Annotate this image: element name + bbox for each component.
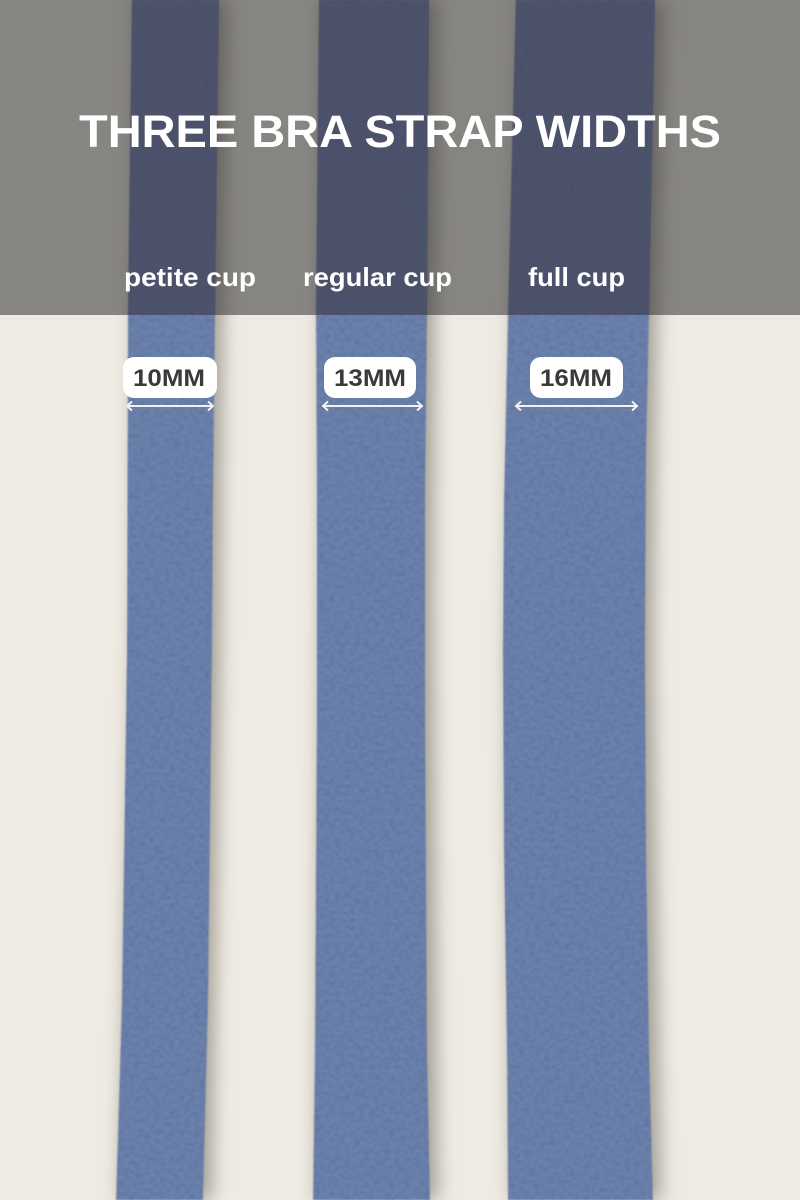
arrow: 13mm width bbox=[323, 405, 422, 407]
badge: 10mm: 10MM bbox=[133, 365, 205, 392]
badge: 13mm: 13MM bbox=[334, 365, 406, 392]
strap: full cup 16mm bbox=[503, 0, 655, 1200]
strap tint inside header band bbox=[128, 0, 655, 315]
label: regular cup: regular cup bbox=[303, 262, 452, 292]
label: full cup: full cup bbox=[528, 262, 625, 292]
badge: 10mm bbox=[123, 357, 217, 398]
arrow: 10mm width bbox=[127, 405, 213, 407]
arrow: 16mm width bbox=[516, 405, 637, 407]
label: petite cup: petite cup bbox=[124, 262, 256, 292]
badge: 16mm: 16MM bbox=[540, 365, 612, 392]
title: THREE BRA STRAP WIDTHS bbox=[79, 106, 721, 157]
badge: 16mm bbox=[530, 357, 623, 398]
strap: petite cup 10mm bbox=[116, 0, 219, 1200]
strap shadows bbox=[120, 0, 663, 1200]
badge: 13mm bbox=[324, 357, 416, 398]
header band bbox=[0, 0, 800, 315]
strap: regular cup 13mm bbox=[313, 0, 430, 1200]
